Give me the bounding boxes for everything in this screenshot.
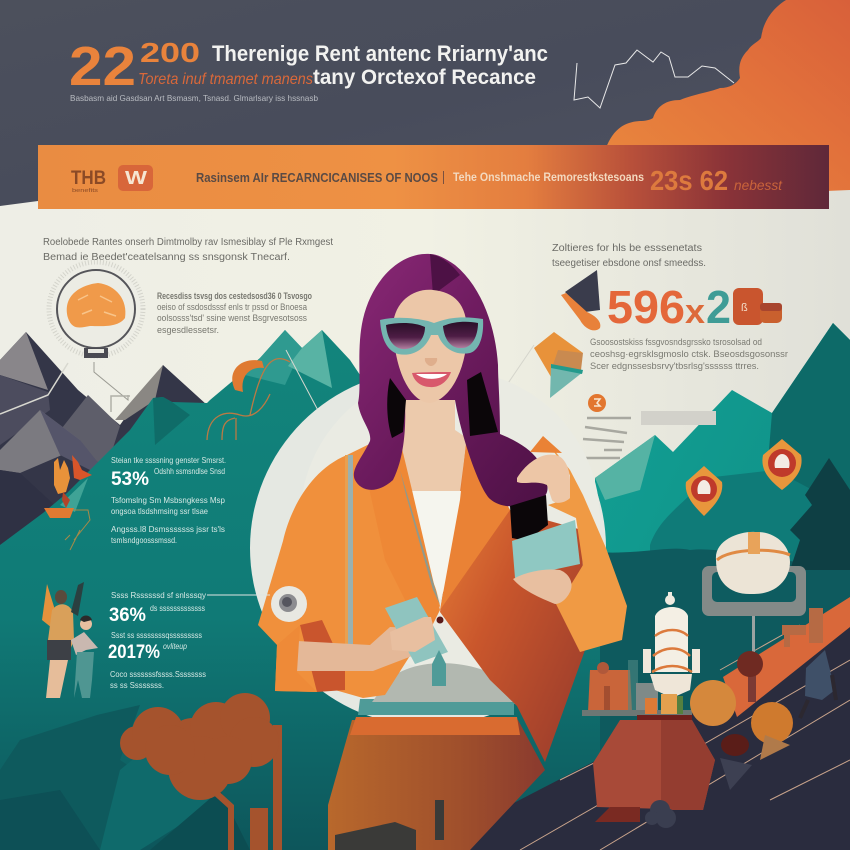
connector line bbox=[207, 594, 270, 596]
chimneys bbox=[782, 608, 823, 647]
banner logo: badge: W bbox=[125, 168, 147, 188]
text block: upper left: Roelobede Rantes onserh Dimtmolby rav Ismesiblay sf Ple Rxmgest bbox=[43, 237, 333, 248]
stat paragraph three bbox=[110, 669, 206, 690]
text block: brain description bbox=[157, 291, 312, 335]
pale circle behind woman bbox=[250, 370, 606, 726]
stat value 2017%: 2017% bbox=[108, 642, 160, 663]
bag strap bbox=[345, 455, 353, 645]
grey placeholder bar bbox=[641, 411, 716, 425]
sunglasses bbox=[380, 317, 483, 355]
stat line: Steian tke ssssning genster Smsrst. bbox=[111, 455, 226, 465]
woman figure right bbox=[71, 616, 98, 698]
line chart sketch bbox=[574, 50, 734, 108]
icon: line camel bbox=[207, 359, 290, 440]
text block: brain description: oolsosss'tsd' ssine wenst Bsgrvesotsoss bbox=[157, 313, 307, 323]
lower dark facets bbox=[0, 705, 180, 850]
big number: 2 bbox=[706, 281, 731, 333]
icon: brain dial bbox=[49, 262, 143, 358]
pine tree bbox=[790, 458, 850, 570]
dark left mountains bbox=[0, 332, 207, 545]
banner logo: TH: THB bbox=[71, 168, 106, 189]
stat side note two: ds sssssssssssss bbox=[150, 603, 205, 613]
big number bbox=[607, 281, 731, 333]
icon: orange key with steps bbox=[583, 394, 631, 458]
stat side note: Odshh ssmsndlse Snsd bbox=[154, 466, 225, 476]
title block bbox=[69, 35, 548, 103]
dome on stand bbox=[702, 532, 806, 652]
right mountains bbox=[595, 323, 850, 850]
big teal landscape bbox=[0, 330, 600, 850]
people illustration bbox=[42, 582, 98, 698]
lower-left foreground wall over skirt bbox=[335, 822, 416, 850]
mouth bbox=[412, 372, 451, 387]
left lapel bbox=[365, 432, 440, 640]
text block: number description: Gsoosostskiss fssgvosndsgrssko tsrosolsad od bbox=[590, 337, 762, 348]
text block: number description bbox=[590, 337, 788, 372]
fingers bbox=[390, 617, 435, 652]
stat paragraph two: Angsss.l8 Dsmsssssss jssr ts'ls bbox=[111, 524, 225, 534]
rocket tower bbox=[643, 592, 700, 714]
stat paragraph two: tsmlsndgoosssmssd. bbox=[111, 535, 177, 545]
text block: upper right bbox=[552, 243, 706, 269]
camera bbox=[271, 586, 307, 622]
jacket button bbox=[436, 616, 444, 624]
cream inside circle bbox=[300, 370, 600, 670]
bottom-left cloud on pipes bbox=[120, 693, 282, 850]
stat paragraph one: Tsfomslng Sm Msbsngkess Msp bbox=[111, 495, 225, 505]
card bbox=[512, 520, 580, 578]
year large: 22 bbox=[69, 35, 136, 97]
text block: upper right: Zoltieres for hls be esssenetats bbox=[552, 243, 702, 254]
icon: orange bag bbox=[733, 288, 782, 325]
stat paragraph three: ss ss Ssssssss. bbox=[110, 680, 164, 690]
face bbox=[393, 290, 467, 403]
stat paragraph two bbox=[111, 524, 225, 545]
text block: number description: Scer edgnssesbsrvy'tbsrlsg'ssssss ttrres. bbox=[590, 361, 759, 372]
stat value 53%: 53% bbox=[111, 469, 149, 490]
right jacket panel bbox=[440, 434, 585, 762]
road lines bbox=[520, 625, 850, 850]
heading line two: tany Orctexof Recance bbox=[313, 66, 536, 89]
woman bbox=[258, 254, 627, 850]
brown ball bbox=[737, 651, 763, 702]
neck and chest bbox=[398, 395, 467, 492]
heading line one: Therenige Rent antenc Rriarny'anc bbox=[212, 41, 548, 66]
orange wall bbox=[723, 597, 850, 717]
marker one bbox=[686, 466, 722, 516]
heading orange subtitle: Toreta inuf tmamet manens bbox=[138, 71, 313, 88]
skirt bbox=[328, 720, 545, 850]
banner logo: TH: benefits bbox=[72, 188, 99, 194]
stat paragraph one bbox=[111, 495, 225, 516]
banner divider bbox=[443, 171, 444, 184]
stat line three: Ssst ss ssssssssqsssssssss bbox=[111, 630, 202, 640]
left sleeve bbox=[258, 455, 355, 692]
text block: number description: ceoshsg·egrsklsgmoslo ctsk. Bseosdsgosonssr bbox=[590, 349, 788, 360]
left arm and hand bbox=[297, 627, 435, 671]
orange cloud, top right bbox=[606, 0, 850, 200]
grey shirt bbox=[372, 663, 520, 702]
right lapel bbox=[440, 434, 510, 610]
skirt waistband bbox=[350, 717, 520, 735]
sleeve cuff bbox=[275, 625, 317, 692]
pendant bbox=[432, 650, 446, 686]
big number: 596 bbox=[607, 281, 685, 333]
connector lines bbox=[0, 350, 330, 433]
grey bush bbox=[645, 800, 676, 828]
icon: orange bag: ß bbox=[741, 302, 748, 314]
text block: brain description: Recesdiss tsvsg dos cestedsosd36 0 Tsvosgo bbox=[157, 291, 312, 301]
stat value 36%: 36% bbox=[109, 605, 146, 626]
right hand bbox=[513, 569, 572, 604]
banner sub text: Tehe Onshmache Remorestkstesoans bbox=[453, 172, 644, 184]
icon: tool bbox=[561, 270, 600, 330]
teal belt bbox=[358, 699, 514, 715]
banner logo: badge bbox=[118, 165, 153, 191]
foreground post bbox=[435, 800, 444, 840]
stat heading line: Ssss Rssssssd sf snlsssqy bbox=[111, 590, 207, 600]
stat paragraph three: Coco sssssssfssss.Ssssssss bbox=[110, 669, 206, 679]
dark ground slope bbox=[423, 627, 850, 850]
text block: upper right: tseegetiser ebsdone onsf smeedss. bbox=[552, 258, 706, 269]
background: dark header bbox=[0, 0, 850, 206]
stat paragraph one: ongsoa tlsdshmsing ssr tlsae bbox=[111, 506, 208, 516]
banner heading: Rasinsem AIr RECARNCICANISES OF NOOS bbox=[196, 170, 438, 185]
upper hand cuff bbox=[530, 436, 562, 453]
orange shrubs bbox=[690, 680, 793, 760]
year small: 200 bbox=[140, 37, 200, 68]
white top bbox=[410, 491, 462, 600]
black hair shadow bbox=[387, 372, 548, 541]
stat side note three: ovliteup bbox=[163, 641, 187, 651]
banner bbox=[38, 145, 829, 209]
icon: orange arch bbox=[232, 360, 264, 392]
text block: brain description: esgesdlessetsr. bbox=[157, 325, 219, 335]
hair bbox=[354, 254, 548, 506]
text block: upper left bbox=[43, 237, 333, 263]
woman figure left bbox=[42, 582, 84, 698]
icon: origami bbox=[500, 332, 583, 398]
header small text: Basbasm aid Gasdsan Art Bsmasm, Tsnasd. Glmarlsary iss hssnasb bbox=[70, 93, 318, 103]
stats upper left bbox=[111, 455, 226, 545]
lower-right scene bbox=[423, 532, 850, 850]
nose bbox=[425, 358, 437, 366]
figure low bbox=[720, 734, 752, 790]
phone bbox=[385, 597, 448, 664]
banner number: 23s 62 bbox=[650, 165, 728, 196]
buildings bbox=[582, 660, 692, 716]
left jacket body bbox=[300, 430, 440, 698]
marker two bbox=[762, 439, 802, 490]
text block: brain description: oeiso of ssdosdsssf enls tr pssd or Bnoesa bbox=[157, 302, 307, 312]
stats lower left bbox=[108, 590, 270, 690]
red block bbox=[593, 715, 715, 822]
big number: x bbox=[685, 293, 705, 331]
banner number label: nebesst bbox=[734, 177, 783, 193]
upper hand bbox=[517, 455, 570, 503]
text block: upper left: Bemad ie Beedet'ceatelsanng ss snsgonsk Tnecarf. bbox=[43, 252, 290, 263]
location markers bbox=[686, 439, 802, 516]
right sleeve bbox=[543, 436, 627, 652]
icon: orange flame in bowl bbox=[44, 455, 92, 550]
figure on slope bbox=[800, 650, 836, 718]
